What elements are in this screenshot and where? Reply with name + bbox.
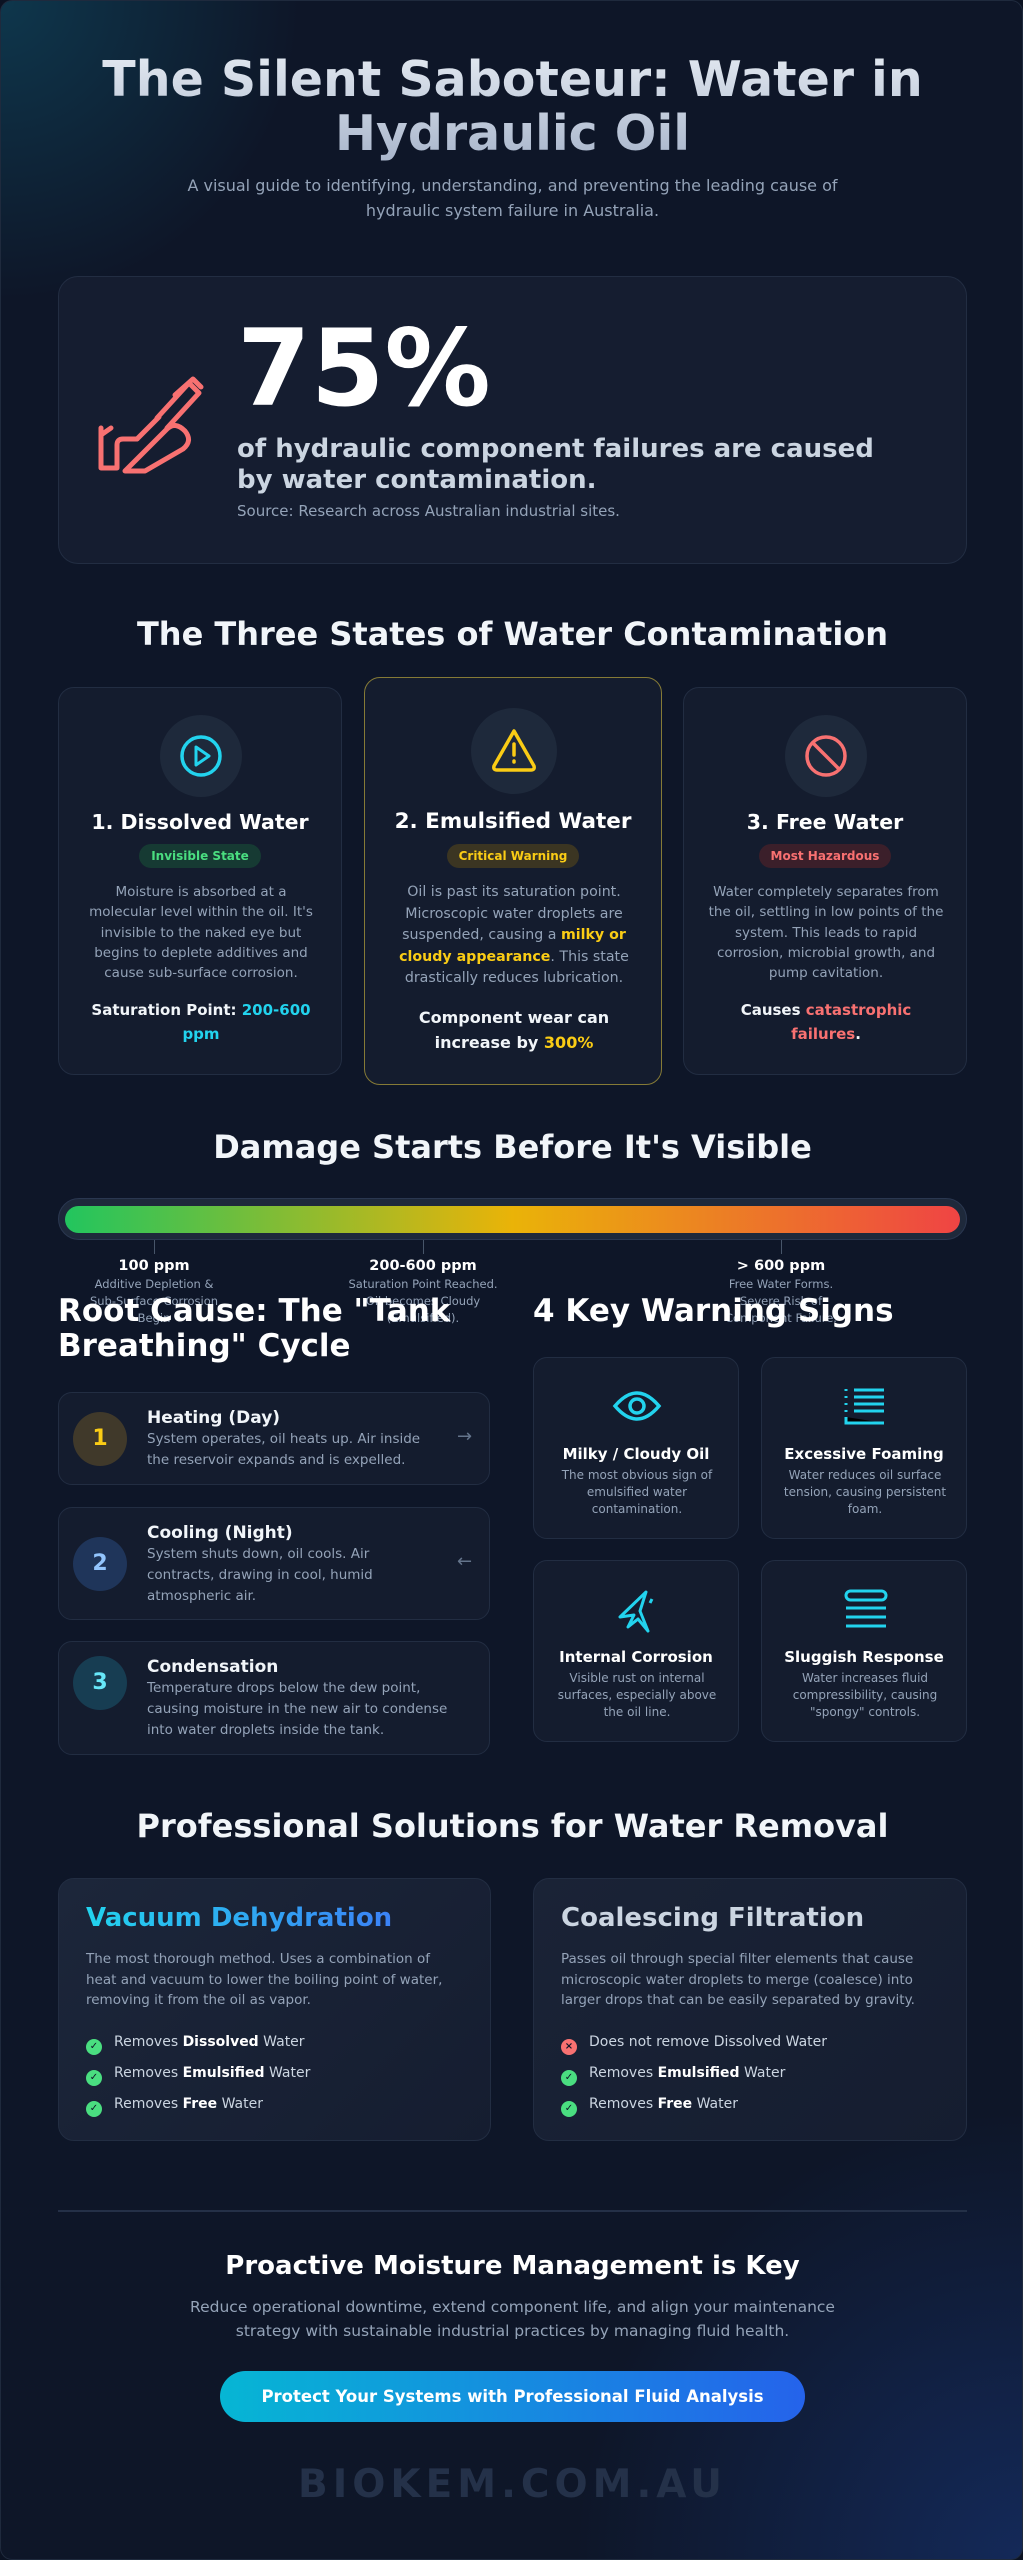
label: >600 ppm: Free Water Forms. Severe Risk of Component Failure. [725, 1277, 837, 1325]
step: cooling: 2 [92, 1551, 108, 1576]
card title: 1. Dissolved Water [91, 810, 309, 834]
panel: emulsified water [364, 677, 662, 1085]
sign: milky oil: Milky / Cloudy Oil [563, 1445, 709, 1463]
label: 100 ppm: 100 ppm [118, 1258, 190, 1274]
sign: sluggish [761, 1560, 967, 1742]
panel: vacuum dehydration: Removes Emulsified Water [114, 2065, 310, 2081]
sign: foaming: Water reduces oil surface tension, causing persistent foam. [784, 1468, 946, 1516]
panel: vacuum dehydration: ✓ [90, 2041, 98, 2052]
label: 200-600 ppm: 200-600 ppm [369, 1258, 477, 1274]
sign: sluggish: Sluggish Response [784, 1648, 944, 1666]
panel: coalescing filtration: Removes Emulsified Water [589, 2065, 785, 2081]
saturation note: Saturation Point: 200-600 ppm [91, 1001, 311, 1043]
panel: coalescing filtration: Does not remove Dissolved Water [589, 2034, 827, 2050]
arrow right: → [457, 1426, 472, 1447]
panel: coalescing filtration: Passes oil through special filter elements that cause microscopic water droplets to merge (coalesce) into larger drops that can be easily separated by gravity. [561, 1951, 915, 2008]
step: heating [58, 1392, 490, 1485]
panel: coalescing filtration: ✓ [565, 2103, 573, 2114]
panel: vacuum dehydration: Removes Dissolved Water [114, 2034, 305, 2050]
step: heating: 1 [92, 1426, 108, 1451]
description: Water completely separates from the oil, settling in low points of the system. This leads to rapid corrosion, microbial growth, and pump cavitation. [709, 884, 943, 981]
arrow left: ← [457, 1551, 472, 1572]
badge: Critical Warning [459, 849, 567, 863]
panel: vacuum dehydration: Removes Free Water [114, 2096, 263, 2112]
sign: corrosion: Internal Corrosion [559, 1648, 713, 1666]
panel: vacuum dehydration: Vacuum Dehydration [86, 1903, 392, 1933]
heading: warning signs: 4 Key Warning Signs [533, 1293, 894, 1329]
wear note: Component wear can increase by 300% [419, 1008, 609, 1052]
chart: ppm gradient bar [58, 1198, 967, 1325]
closing text: Reduce operational downtime, extend component life, and align your maintenance strategy with sustainable industrial practices by managing fluid health. [190, 2298, 835, 2340]
label: 200-600 ppm: Saturation Point Reached. Oil becomes Cloudy (Emulsified). [348, 1277, 498, 1325]
panel: coalescing filtration: Removes Free Water [589, 2096, 738, 2112]
icon: ban [785, 715, 867, 797]
step: cooling [58, 1507, 490, 1620]
sign: corrosion [533, 1560, 739, 1742]
icon: broken pipe wrench [98, 376, 204, 474]
sign: sluggish: Water increases fluid compressibility, causing "spongy" controls. [793, 1671, 937, 1719]
panel: free water [683, 687, 967, 1075]
heading: root cause: Root Cause: The "Tank Breathing" Cycle [58, 1293, 450, 1364]
step: condensation: 3 [92, 1670, 108, 1695]
panel: coalescing filtration: ✓ [565, 2072, 573, 2083]
title: The Silent Saboteur: Water in [102, 51, 923, 108]
button [220, 2371, 805, 2422]
footer brand: BIOKEM.COM.AU [298, 2462, 727, 2507]
panel: coalescing filtration: × [565, 2041, 573, 2052]
step: heating: Heating (Day) [147, 1408, 280, 1428]
title [41, 53, 984, 161]
card title: 3. Free Water [747, 810, 903, 834]
hazard note: Causes catastrophic failures. [741, 1001, 911, 1043]
heading: three states: The Three States of Water Contamination [137, 615, 888, 653]
label: 100 ppm: Additive Depletion & Sub-Surface Corrosion Begin [90, 1277, 218, 1325]
badge: Invisible State [151, 849, 249, 863]
step: cooling: System shuts down, oil cools. Air contracts, drawing in cool, humid atmospheric air. [147, 1546, 373, 1604]
description: Moisture is absorbed at a molecular level within the oil. It's invisible to the naked eye but begins to deplete additives and cause sub-surface corrosion. [89, 884, 313, 981]
step: condensation [58, 1641, 490, 1755]
step: cooling: Cooling (Night) [147, 1523, 293, 1543]
sign: milky oil: The most obvious sign of emulsified water contamination. [562, 1468, 712, 1516]
panel: vacuum dehydration: The most thorough method. Uses a combination of heat and vacuum to lower the boiling point of water, removing it from the oil as vapor. [86, 1951, 442, 2008]
title: Hydraulic Oil [335, 105, 690, 162]
button: Protect Your Systems with Professional Fluid Analysis [261, 2387, 764, 2406]
step: condensation: Temperature drops below the dew point, causing moisture in the new air to condense into water droplets inside the tank. [147, 1680, 447, 1738]
panel: coalescing filtration: Coalescing Filtration [561, 1903, 864, 1933]
sign: milky oil [533, 1357, 739, 1539]
panel: vacuum dehydration [58, 1878, 491, 2141]
big number: 75% [237, 307, 491, 430]
icon: play circle [160, 715, 242, 797]
stat text: of hydraulic component failures are caused by water contamination. [237, 434, 874, 495]
sign: corrosion: Visible rust on internal surfaces, especially above the oil line. [558, 1671, 716, 1719]
description: Oil is past its saturation point. Microscopic water droplets are suspended, causing a milky or cloudy appearance. This state drastically reduces lubrication. [399, 884, 629, 986]
heading: proactive: Proactive Moisture Management is Key [225, 2251, 800, 2281]
panel: hero statistic [58, 276, 967, 564]
panel: vacuum dehydration: ✓ [90, 2072, 98, 2083]
sign: foaming [761, 1357, 967, 1539]
badge: Most Hazardous [771, 849, 879, 863]
subtitle: A visual guide to identifying, understanding, and preventing the leading cause of hydraulic system failure in Australia. [187, 176, 838, 220]
step: heating: System operates, oil heats up. Air inside the reservoir expands and is expelled. [147, 1431, 420, 1468]
source: Source: Research across Australian industrial sites. [237, 502, 620, 520]
panel: vacuum dehydration: ✓ [90, 2103, 98, 2114]
panel: dissolved water [58, 687, 342, 1075]
icon: warning triangle [471, 708, 557, 794]
sign: foaming: Excessive Foaming [784, 1445, 944, 1463]
heading: solutions: Professional Solutions for Water Removal [137, 1807, 888, 1845]
card title: 2. Emulsified Water [395, 809, 631, 834]
step: condensation: Condensation [147, 1657, 278, 1677]
panel: coalescing filtration [533, 1878, 967, 2141]
heading: damage: Damage Starts Before It's Visible [213, 1128, 812, 1166]
label: >600 ppm: > 600 ppm [737, 1258, 825, 1274]
